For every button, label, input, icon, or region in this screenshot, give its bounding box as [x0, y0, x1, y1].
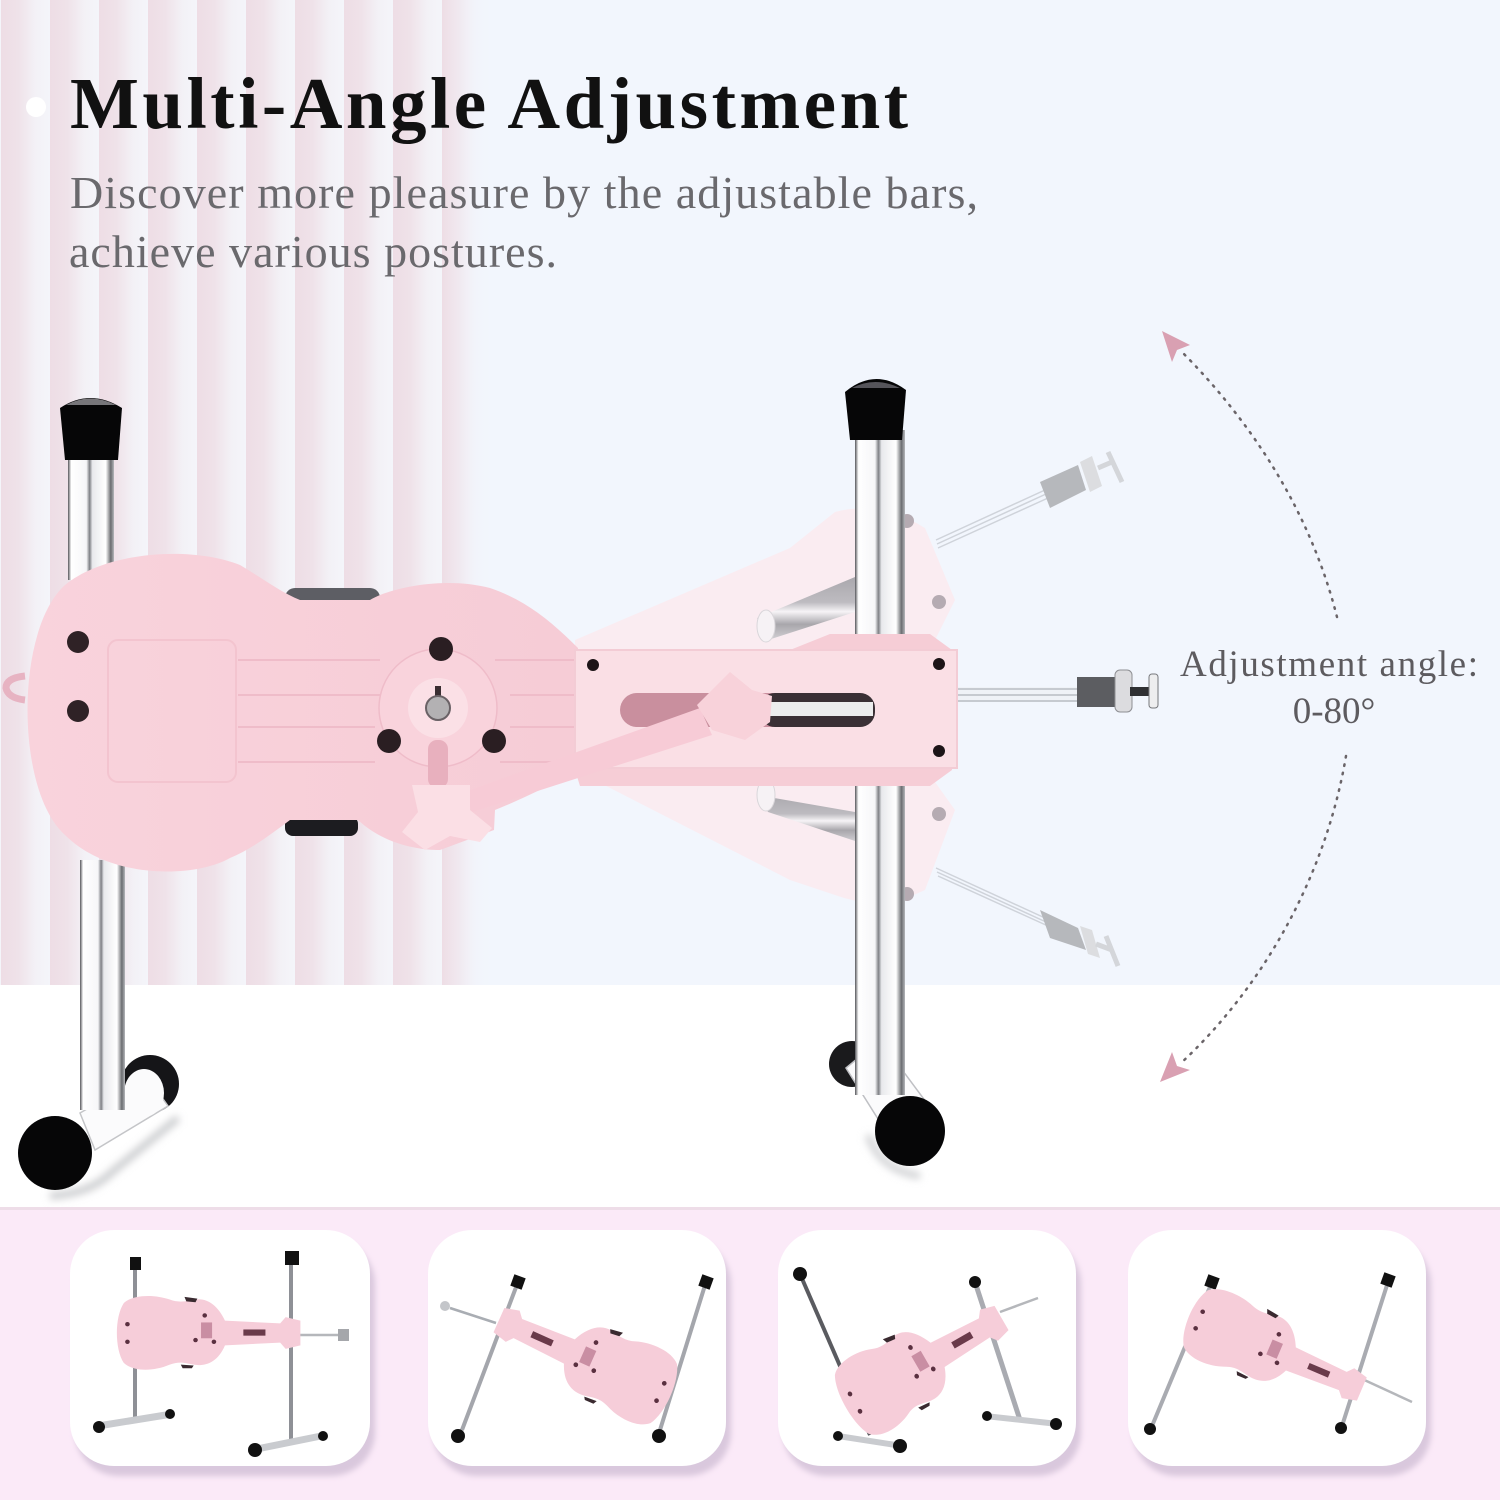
- machine dark parts behind body: [285, 588, 380, 836]
- subtitle text: [69, 167, 978, 277]
- angle label: 0-80°: [1293, 691, 1375, 732]
- angle label: [1180, 644, 1478, 732]
- main arm rod and bolt: [955, 670, 1158, 712]
- lever arm: [465, 708, 712, 812]
- title: Multi-Angle Adjustment: [70, 63, 908, 144]
- background: striped wall fading to pale blue: [0, 0, 1500, 985]
- ghost arm: lower position: [575, 770, 1118, 966]
- bottom band: [0, 1207, 1500, 1500]
- posture card 1: [70, 1230, 370, 1466]
- subtitle text: achieve various postures.: [69, 226, 557, 277]
- bullet dot: [26, 97, 46, 117]
- adjustment arm plate: [402, 634, 957, 850]
- lower dotted arc arrow: [1160, 756, 1346, 1082]
- display panel outline: [108, 640, 236, 782]
- rib lines: [238, 660, 575, 762]
- posture card 2: [428, 1230, 726, 1466]
- star knob on lever: [697, 672, 772, 740]
- tail hook: [6, 676, 25, 700]
- angle label: Adjustment angle:: [1180, 644, 1478, 685]
- posture card 3: [778, 1230, 1076, 1466]
- floor: [0, 985, 1500, 1207]
- ghost arm: upper position: [575, 452, 1122, 650]
- machine body: [6, 554, 578, 872]
- posture card 4: [1128, 1230, 1426, 1466]
- lower knob: [402, 785, 492, 850]
- stand: right leg: [829, 379, 945, 1176]
- stand: left leg: [18, 398, 179, 1196]
- upper dotted arc arrow: [1162, 331, 1337, 617]
- pivot plate: [379, 649, 497, 767]
- subtitle text: Discover more pleasure by the adjustable bars,: [70, 167, 978, 218]
